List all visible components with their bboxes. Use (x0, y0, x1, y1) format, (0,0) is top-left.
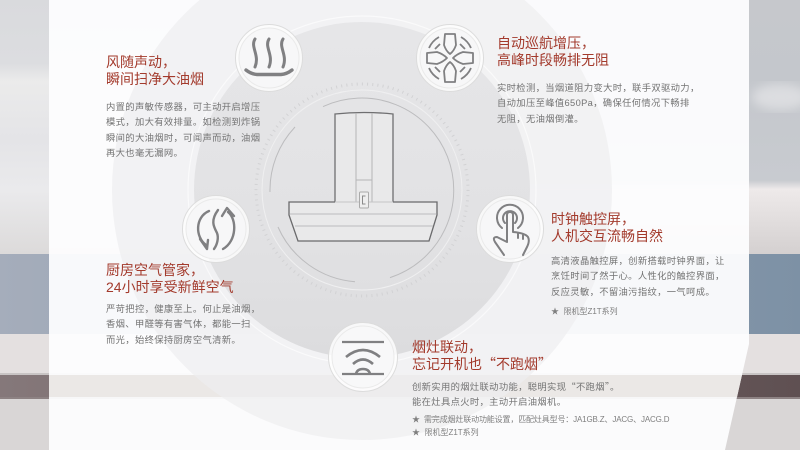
icon: four-way fan (416, 24, 484, 92)
heading (412, 339, 552, 374)
heading: 风随声动， (106, 54, 176, 70)
heading: 自动巡航增压， (497, 35, 595, 51)
body text: 再大也毫无漏网。 (106, 148, 183, 158)
feature: auto cruise pressure (416, 24, 700, 124)
body text (106, 304, 260, 345)
feature: air manager (106, 195, 260, 345)
icon: finger touch (477, 195, 544, 263)
body text: 反应灵敏，不留油污指纹，一气呵成。 (551, 287, 715, 297)
heading (551, 211, 663, 244)
body text: 而光，始终保持厨房空气清新。 (106, 335, 241, 345)
body text: 高清液晶触控屏，创新搭载时钟界面，让 (551, 256, 725, 266)
heading: 瞬间扫净大油烟 (106, 71, 204, 87)
heading: 烟灶联动， (412, 339, 482, 355)
footnotes (412, 415, 670, 437)
icon: circulating air (182, 195, 249, 262)
footnotes: ★ 限机型Z1T系列 (412, 428, 479, 437)
body text: 创新实用的烟灶联动功能，聪明实现“不跑烟”。 (412, 379, 620, 393)
feature: stove linkage (328, 323, 670, 437)
body text (412, 379, 620, 407)
body text: 无阻，无油烟倒灌。 (497, 114, 584, 124)
body text (106, 102, 260, 158)
heading: 厨房空气管家， (106, 262, 204, 278)
heading (106, 54, 204, 87)
body text: 实时检测，当烟道阻力变大时，联手双驱动力， (497, 83, 700, 93)
feature: wind follows sound (106, 24, 303, 158)
feature: clock touch screen (477, 195, 725, 316)
icon: steam over pan (235, 24, 303, 92)
footnote: ★ 限机型Z1T系列 (551, 307, 618, 316)
body text (551, 256, 725, 297)
body text: 烹饪时间了然于心。人性化的触控界面， (551, 271, 725, 281)
heading: 高峰时段畅排无阻 (497, 52, 609, 68)
body text: 严苛把控，健康至上。何止是油烟， (106, 304, 260, 314)
icon: stove signal (328, 323, 398, 392)
body text: 内置的声敏传感器，可主动开启增压 (106, 102, 260, 112)
heading: 24小时享受新鲜空气 (106, 279, 234, 295)
body text: 能在灶具点火时，主动开启油烟机。 (412, 397, 566, 407)
heading: 忘记开机也“不跑烟” (412, 354, 552, 374)
body text (497, 83, 700, 124)
heading: 时钟触控屏， (551, 211, 635, 227)
footnotes: ★ 需完成烟灶联动功能设置，匹配灶具型号：JA1GB.Z、JACG、JACG.D (412, 415, 669, 424)
body text: 瞬间的大油烟时，可闻声而动，油烟 (106, 133, 260, 143)
body text: 模式，加大有效排量。如检测到炸锅 (106, 117, 260, 127)
body text: 自动加压至峰值650Pa，确保任何情况下畅排 (497, 98, 690, 108)
heading (106, 262, 234, 295)
body text: 香烟、甲醛等有害气体，都能一扫 (106, 319, 251, 329)
heading: 人机交互流畅自然 (551, 228, 663, 244)
heading (497, 35, 609, 68)
